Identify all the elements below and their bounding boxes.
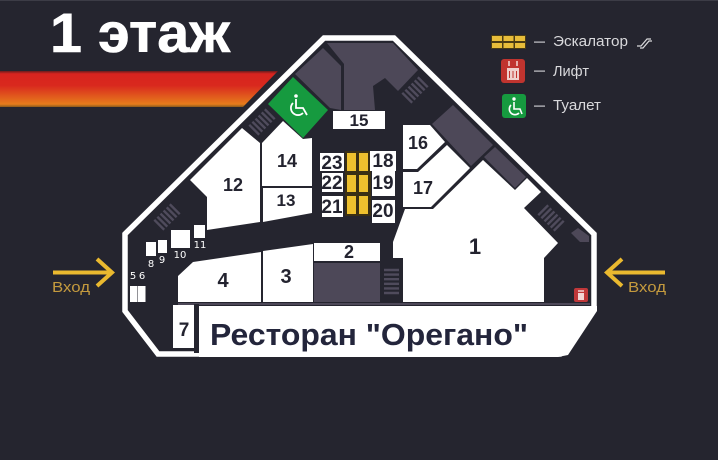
legend: toilet: [502, 94, 601, 118]
store 13: 13: [277, 191, 295, 210]
restaurant Oregano: [194, 304, 597, 357]
small shops 5-11: 11: [194, 240, 206, 251]
store 1: 1: [469, 234, 481, 259]
small shops 5-11: 5: [130, 271, 136, 282]
gradient band: [0, 71, 278, 107]
store labels 18-23: 19: [372, 173, 394, 194]
store 15: [333, 111, 385, 130]
store 13: [263, 188, 312, 222]
store 2: [314, 242, 380, 262]
store labels 18-23: 20: [372, 201, 394, 222]
store 12: [190, 128, 260, 230]
store 17: 17: [413, 178, 433, 198]
store 15: 15: [350, 111, 368, 130]
restaurant Oregano: Ресторан "Орегано": [210, 317, 528, 352]
left entrance arrow: Вход: [52, 279, 90, 296]
legend: escalator: Эскалатор: [553, 34, 628, 50]
legend: [491, 34, 652, 118]
right entrance arrow: Вход: [628, 279, 666, 296]
store 4: 4: [217, 270, 229, 292]
store 16: [403, 125, 445, 169]
accessible toilet: [268, 77, 328, 138]
building outline: [125, 38, 594, 354]
store 7: [173, 305, 194, 348]
small shops 5-11: 9: [159, 255, 165, 266]
store 16: 16: [408, 133, 428, 153]
store 1: [393, 160, 558, 302]
small shops 5-11: [130, 225, 206, 302]
legend: toilet: Туалет: [553, 98, 601, 114]
legend: lift: Лифт: [553, 64, 589, 80]
floor plan: [125, 38, 597, 357]
store 7: 7: [179, 320, 189, 341]
small shops 5-11: 8: [148, 259, 154, 270]
store 2: 2: [344, 242, 354, 262]
store 4: [178, 252, 261, 302]
stairs: [154, 77, 564, 293]
store labels 18-23: [320, 151, 396, 223]
legend: escalator: [491, 34, 652, 50]
store labels 18-23: 21: [321, 197, 343, 218]
store 14: [262, 121, 312, 186]
small shops 5-11: 6: [139, 271, 145, 282]
store 17: [403, 145, 470, 207]
store 3: 3: [280, 266, 292, 288]
store 12: 12: [223, 175, 243, 195]
small lift icon: [574, 288, 588, 302]
store 3: [263, 244, 313, 302]
escalators: [345, 151, 371, 216]
store labels 18-23: 23: [321, 153, 343, 174]
title: 1 этаж: [50, 1, 231, 64]
left entrance arrow: [52, 259, 112, 296]
right entrance arrow: [607, 259, 666, 296]
store 14: 14: [277, 151, 297, 171]
service areas: [178, 43, 590, 305]
legend: lift: [501, 59, 589, 83]
store labels 18-23: 22: [321, 173, 343, 194]
small shops 5-11: 10: [174, 250, 186, 261]
store labels 18-23: 18: [372, 151, 394, 172]
